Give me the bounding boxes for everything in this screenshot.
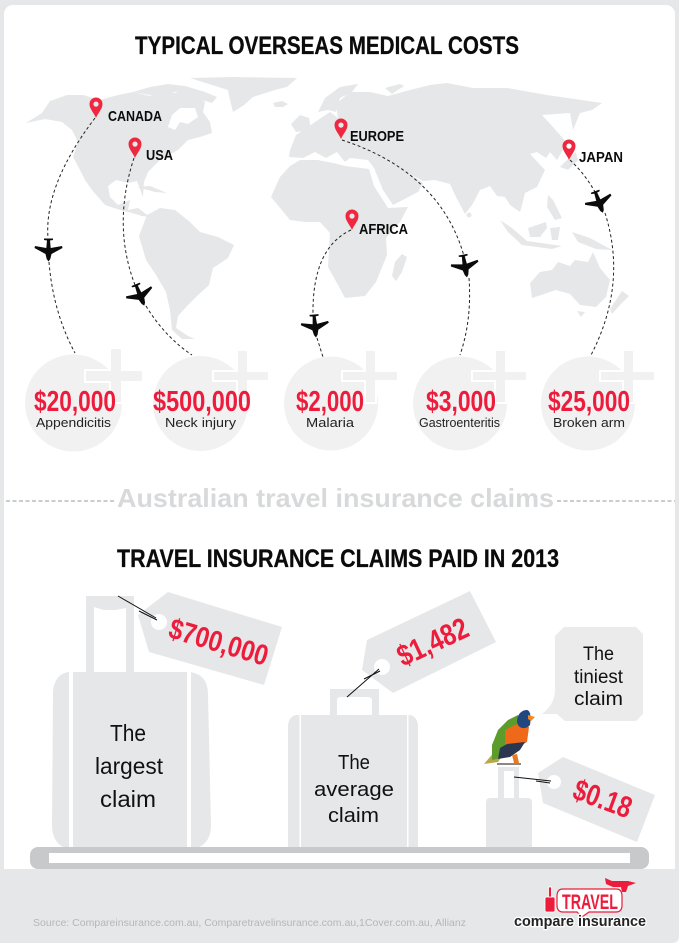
cost: Malaria — [284, 350, 398, 450]
icon: plane Canada — [34, 238, 62, 262]
South America — [139, 208, 234, 339]
suitcase: average — [288, 689, 418, 848]
Iceland — [273, 101, 288, 107]
label: Japan: JAPAN — [579, 149, 623, 166]
Eurasia — [289, 83, 602, 214]
icon: plane Japan — [582, 186, 616, 218]
icon: pin USA — [128, 138, 142, 158]
logo wordmark: compare insurance — [514, 913, 646, 930]
route: Africa — [313, 230, 351, 357]
speech bubble: tiniest — [574, 667, 624, 688]
New Guinea — [572, 232, 612, 250]
Sumatra and Java — [500, 220, 562, 249]
logo bubble — [557, 889, 622, 917]
cost: Malaria: Malaria — [306, 415, 355, 430]
Australia — [530, 252, 610, 307]
cost: Gastroenteritis — [413, 350, 527, 450]
footer band — [0, 869, 679, 943]
logo plane — [605, 878, 636, 892]
cost: Appendicitis: Appendicitis — [36, 415, 112, 430]
Sri Lanka — [466, 212, 472, 218]
cost: Gastroenteritis: $3,000 — [426, 386, 496, 418]
suitcase: largest: claim — [100, 786, 156, 812]
logo — [514, 878, 646, 930]
speech bubble: claim — [574, 689, 623, 710]
icon: pin Canada — [90, 98, 102, 118]
route: USA — [123, 158, 192, 355]
Cuba — [137, 186, 167, 193]
price tag: tiniest — [514, 757, 655, 842]
Arctic Russia islands — [385, 84, 404, 94]
Philippines — [547, 195, 562, 220]
price tag: tiniest: $0.18 — [569, 774, 636, 825]
icon: plane Europe — [449, 252, 481, 280]
route: Europe — [342, 140, 470, 355]
logo suitcase — [545, 887, 555, 912]
cost: Broken arm: $25,000 — [548, 386, 630, 418]
suitcase: average: The — [338, 752, 370, 774]
price tag: average — [347, 591, 496, 697]
speech bubble — [542, 627, 643, 721]
conveyor belt — [30, 847, 649, 869]
Tasmania — [577, 311, 585, 317]
icon: lorikeet — [484, 710, 535, 765]
icon: pin Africa — [346, 210, 358, 230]
suitcase: tiniest — [486, 767, 532, 848]
Japan islands — [560, 152, 578, 170]
world map — [26, 77, 629, 339]
title: TYPICAL OVERSEAS MEDICAL COSTS — [135, 32, 519, 60]
cost: Neck injury: $500,000 — [153, 386, 251, 418]
subtitle: TRAVEL INSURANCE CLAIMS PAID IN 2013 — [117, 545, 559, 573]
icon: plane USA — [123, 279, 157, 311]
cost: Gastroenteritis: Gastroenteritis — [419, 415, 500, 430]
New Zealand — [610, 291, 629, 314]
suitcase: largest — [52, 596, 211, 848]
Britain — [291, 115, 311, 132]
Africa — [271, 160, 408, 298]
cost: Broken arm: Broken arm — [553, 415, 625, 430]
speech bubble: The — [583, 644, 614, 665]
suitcase: average: average — [314, 779, 394, 801]
corner mask — [672, 936, 679, 943]
Scandinavia — [318, 84, 358, 112]
Arctic islands — [133, 84, 217, 103]
Madagascar — [392, 254, 407, 281]
logo TRAVEL text: TRAVEL — [562, 891, 618, 914]
label: Africa: AFRICA — [359, 221, 408, 238]
suitcase: largest: The — [110, 720, 146, 746]
label: USA: USA — [146, 147, 173, 164]
section heading: Australian travel insurance claims — [117, 483, 554, 513]
label: Canada: CANADA — [108, 108, 162, 125]
price tag: largest — [118, 592, 282, 685]
cost: Appendicitis: $20,000 — [34, 386, 116, 418]
Sulawesi — [550, 227, 560, 240]
cost: Neck injury: Neck injury — [165, 415, 237, 430]
Hudson Bay — [168, 108, 198, 130]
cost: Malaria: $2,000 — [296, 386, 364, 418]
North America — [26, 90, 212, 217]
icon: pin Europe — [334, 118, 348, 139]
divider — [6, 500, 675, 502]
cost: Appendicitis — [25, 348, 143, 452]
icon: plane Africa — [300, 313, 330, 339]
icon: pin Japan — [562, 140, 576, 160]
Borneo — [528, 222, 547, 237]
price tag: largest: $700,000 — [165, 613, 272, 673]
source note: Source: Compareinsurance.com.au, Comparetravelinsurance.com.au,1Cover.com.au, Allianz — [33, 917, 466, 929]
price tag: average: $1,482 — [392, 612, 474, 673]
suitcase: average: claim — [328, 805, 379, 827]
Greenland — [190, 77, 297, 112]
label: Europe: EUROPE — [350, 128, 404, 145]
route: Canada — [48, 118, 95, 353]
cost: Broken arm — [541, 350, 655, 450]
suitcase: largest: largest — [95, 753, 164, 779]
cost: Neck injury — [153, 350, 269, 451]
route: Japan — [570, 160, 614, 357]
